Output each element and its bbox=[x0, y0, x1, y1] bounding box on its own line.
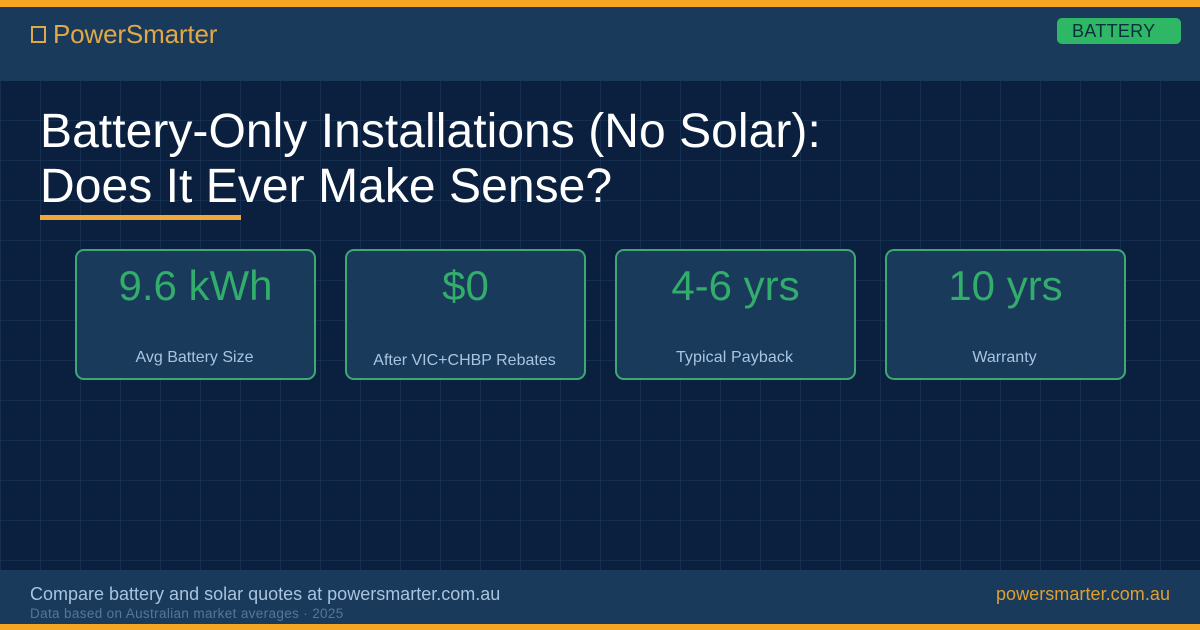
stat card: payback bbox=[615, 249, 856, 380]
title bbox=[40, 105, 821, 213]
icon: missing glyph box bbox=[31, 26, 46, 43]
data source note: Data based on Australian market averages · 2025 bbox=[30, 606, 344, 621]
footer call to action: Compare battery and solar quotes at powersmarter.com.au bbox=[30, 584, 500, 604]
title: Does It Ever Make Sense? bbox=[40, 160, 612, 213]
value: $0 bbox=[442, 262, 489, 309]
label: Avg Battery Size bbox=[136, 349, 253, 366]
category badge: BATTERY bbox=[1072, 21, 1155, 41]
header bar bbox=[0, 0, 1200, 81]
stat card: warranty bbox=[885, 249, 1126, 380]
title underline bbox=[40, 215, 241, 220]
label: Typical Payback bbox=[676, 349, 793, 366]
category badge bbox=[1057, 18, 1181, 44]
title: Battery-Only Installations (No Solar): bbox=[40, 105, 821, 158]
footer bar bbox=[0, 570, 1200, 630]
value: 10 yrs bbox=[948, 262, 1063, 309]
stat card: battery size bbox=[75, 249, 316, 380]
label: Warranty bbox=[972, 349, 1037, 366]
stat card: rebates bbox=[345, 249, 586, 380]
label: After VIC+CHBP Rebates bbox=[373, 352, 556, 369]
brand name: PowerSmarter bbox=[53, 19, 217, 49]
value: 9.6 kWh bbox=[118, 262, 273, 309]
value: 4-6 yrs bbox=[671, 262, 800, 309]
footer URL: powersmarter.com.au bbox=[996, 584, 1170, 604]
